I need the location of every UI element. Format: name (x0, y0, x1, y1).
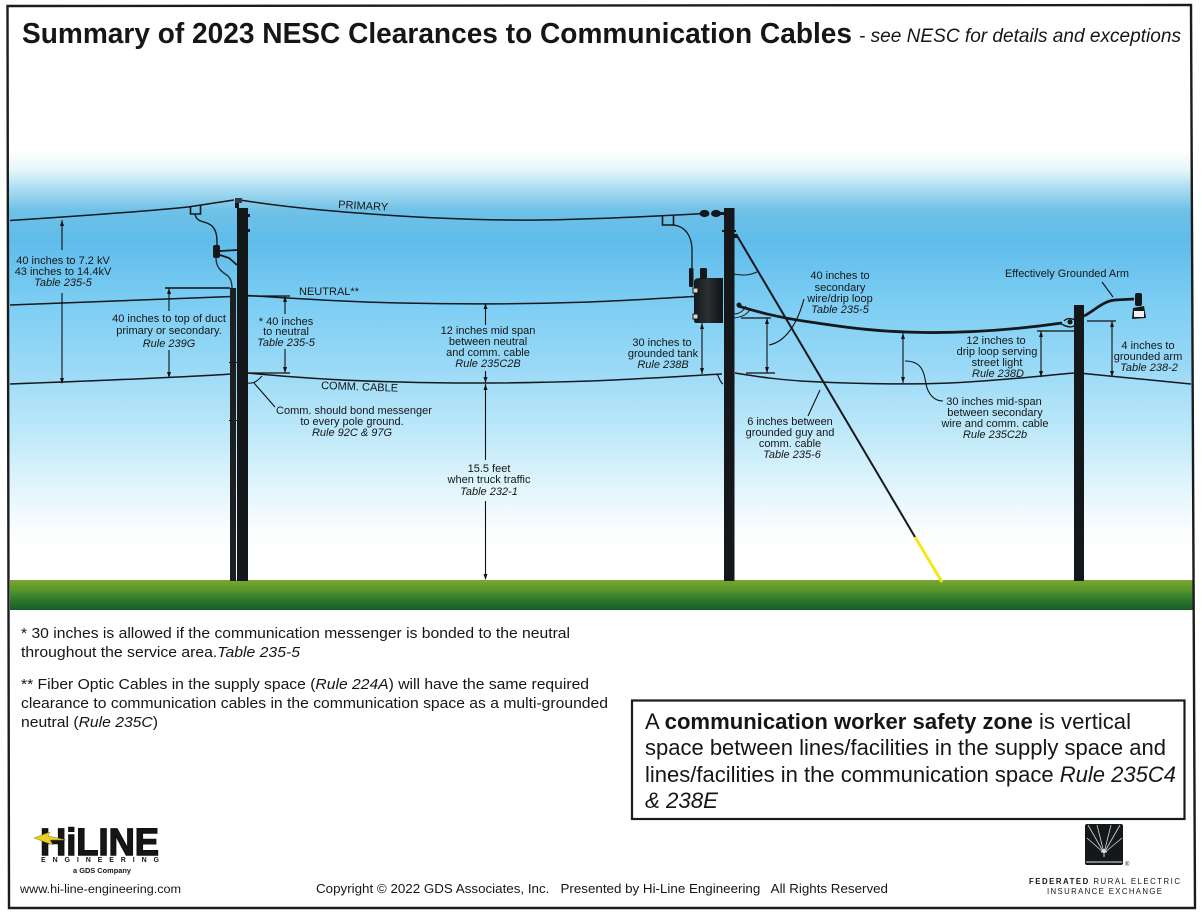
callout: comm bond (254, 383, 432, 439)
footnote: fiber optic cables: neutral (Rule 235C ) (21, 715, 158, 731)
communication cable (10, 373, 1191, 384)
title: Summary of 2023 NESC Clearances to Communication Cables (22, 18, 852, 50)
dimension: 40 inches to neutral (248, 296, 316, 373)
callout box: communication worker safety zone: lines/facilities in the communication space Rule 235C4 (645, 762, 1176, 787)
pole 3 with street light (1060, 293, 1146, 581)
callout: comm bond: Rule 92C & 97G (312, 427, 392, 439)
label: neutral: NEUTRAL** (299, 286, 360, 298)
logo: Hi-Line Engineering: ENGINEERING (41, 857, 160, 864)
tap wire (673, 225, 692, 268)
dimension: 15.5 feet (447, 384, 531, 580)
dimension: 4 inches to grounded arm: Table 238-2 (1120, 362, 1178, 374)
dimension: 40 inches to primary: 43 inches to 14.4kV (15, 266, 112, 278)
messenger bond (248, 376, 262, 383)
logo: Hi-Line Engineering: a GDS Company (73, 866, 132, 875)
footnote: fiber optic cables: ** Fiber Optic Cables in the supply space ( Rule 224A) will have the same required (21, 677, 589, 693)
dimension: 40 inches to top of duct: 40 inches to top of duct (112, 313, 226, 325)
dimension: 30 inches to grounded tank: 30 inches to (632, 337, 692, 349)
icon: sunburst square (1085, 824, 1123, 865)
dimension: 12 inches mid span (441, 303, 535, 383)
pole (1074, 305, 1084, 581)
pole (237, 208, 248, 581)
dimension: 12 inches to drip loop: street light (972, 357, 1022, 369)
pole (724, 208, 734, 581)
logo: Hi-Line Engineering: HiLINE (40, 822, 159, 864)
logo: Federated Rural Electric Insurance Exchange: FEDERATED RURAL ELECTRIC (1029, 877, 1180, 886)
label: comm cable: COMM. CABLE (321, 380, 398, 395)
callout: 6 inches guy to comm: 6 inches between (747, 416, 833, 428)
sky background (9, 150, 1192, 582)
insulators (700, 210, 710, 217)
primary tap bracket (190, 205, 200, 214)
website: www.hi-line-engineering.com (19, 882, 181, 896)
callout box: communication worker safety zone: space between lines/facilities in the supply space and (645, 735, 1166, 760)
logo: Federated Rural Electric Insurance Exchange (1029, 824, 1180, 896)
callout: comm bond: to every pole ground. (300, 416, 404, 428)
callout: effectively grounded arm (1005, 268, 1129, 297)
logo: Federated Rural Electric Insurance Exchange: ® (1125, 861, 1130, 868)
dimension: 12 inches mid span: Rule 235C2B (455, 358, 521, 370)
dimension: 40 inches to top of duct: primary or secondary. (116, 325, 222, 337)
dimension: 30 inches mid-span secondary: wire and comm. cable (940, 418, 1048, 430)
comm cable drop at pole 2 (716, 374, 723, 384)
footnote: fiber optic cables: clearance to communication cables in the communication space as a multi-grounded (21, 696, 608, 712)
dimension: 12 inches to drip loop (957, 331, 1075, 380)
callout: 6 inches guy to comm: comm. cable (759, 438, 821, 450)
dimension: 12 inches to drip loop: Rule 238D (972, 368, 1024, 380)
ground: grass strip (10, 580, 1194, 610)
dimension: 15.5 feet: 15.5 feet (468, 463, 510, 475)
callout: effectively grounded arm: Effectively Grounded Arm (1005, 268, 1129, 280)
dimension: 15.5 feet: when truck traffic (447, 474, 531, 486)
dimension: 12 inches mid span: 12 inches mid span (441, 325, 535, 337)
secondary wire (738, 306, 1062, 333)
secondary connection (1060, 319, 1076, 327)
dimension: 12 inches mid span: and comm. cable (446, 347, 530, 359)
dimension: 40 inches to secondary wire: wire/drip loop (806, 293, 873, 305)
dimension: 12 inches to drip loop: drip loop serving (957, 346, 1037, 358)
dimension: 4 inches to grounded arm (1087, 321, 1182, 377)
dimension: 40 inches to secondary wire: Table 235-5 (811, 304, 870, 316)
icon: lightning bolt (34, 832, 66, 845)
dimension: 30 inches mid-span secondary: between secondary (947, 407, 1043, 419)
title: - see NESC for details and exceptions (859, 26, 1181, 47)
primary tap bracket (662, 216, 674, 225)
dimension: 40 inches to secondary wire: 40 inches to (810, 270, 870, 282)
dimension: 30 inches to grounded tank (628, 323, 704, 374)
logo: Federated Rural Electric Insurance Exchange: INSURANCE EXCHANGE (1047, 887, 1162, 896)
dimension: 30 inches to grounded tank: Rule 238B (637, 359, 689, 371)
callout box: communication worker safety zone: & 238E (645, 788, 718, 813)
dimension: 40 inches to neutral: Table 235-5 (257, 337, 316, 349)
neutral and secondary connections (734, 272, 757, 318)
dimension: 12 inches mid span: between neutral (449, 336, 527, 348)
dimension: 40 inches to primary: Table 235-5 (34, 277, 93, 289)
dimension: 40 inches to top of duct (112, 288, 230, 378)
copyright line: Copyright © 2022 GDS Associates, Inc. Presented by Hi-Line Engineering All Rights Reserved (316, 882, 888, 896)
footnote: 30 inches: * 30 inches is allowed if the communication messenger is bonded to the neutral (21, 626, 570, 642)
callout box: communication worker safety zone: A communication worker safety zone is vertical (645, 709, 1131, 734)
wires (10, 200, 1191, 384)
wire labels (299, 199, 398, 395)
dimension: 40 inches to neutral: to neutral (263, 326, 309, 338)
footnote: 30 inches (21, 626, 570, 661)
dimension: 4 inches to grounded arm: grounded arm (1114, 351, 1182, 363)
footnote: fiber optic cables (21, 677, 608, 731)
dimension: 30 inches mid-span secondary (901, 333, 1048, 441)
neutral wire (10, 296, 694, 305)
primary wire (10, 200, 705, 220)
dimension: 40 inches to neutral: * 40 inches (259, 316, 314, 328)
footnote: 30 inches: throughout the service area. Table 235-5 (21, 645, 301, 661)
callout: 6 inches guy to comm (746, 390, 834, 461)
dimension: 40 inches to primary: 40 inches to 7.2 kV (16, 255, 110, 267)
grounded arm (1084, 299, 1134, 316)
dimension: 40 inches to primary (15, 220, 112, 384)
label: primary: PRIMARY (338, 199, 389, 214)
pole 2 with transformer (662, 208, 757, 581)
dimension: 30 inches mid-span secondary: 30 inches mid-span (946, 396, 1042, 408)
callout: comm bond: Comm. should bond messenger (276, 405, 432, 417)
dimension: 15.5 feet: Table 232-1 (460, 486, 518, 498)
guy wire (736, 234, 942, 582)
dimension: 12 inches to drip loop: 12 inches to (966, 335, 1026, 347)
dimension: 40 inches to secondary wire (741, 270, 873, 373)
callout box: communication worker safety zone (632, 700, 1184, 819)
dimension: 30 inches to grounded tank: grounded tank (628, 348, 699, 360)
dimension: 40 inches to secondary wire: secondary (815, 282, 866, 294)
cutout (213, 245, 220, 258)
dimension: 30 inches mid-span secondary: Rule 235C2b (963, 429, 1027, 441)
duct riser (230, 288, 236, 581)
callout: 6 inches guy to comm: Table 235-6 (763, 449, 822, 461)
luminaire head (1135, 293, 1142, 306)
dimension: 40 inches to top of duct: Rule 239G (143, 338, 196, 350)
transformer tank (694, 278, 723, 323)
dimension: 4 inches to grounded arm: 4 inches to (1121, 340, 1175, 352)
tap wire (195, 214, 217, 245)
pole 1 with riser and cutout (190, 198, 262, 581)
callout: 6 inches guy to comm: grounded guy and (746, 427, 834, 439)
